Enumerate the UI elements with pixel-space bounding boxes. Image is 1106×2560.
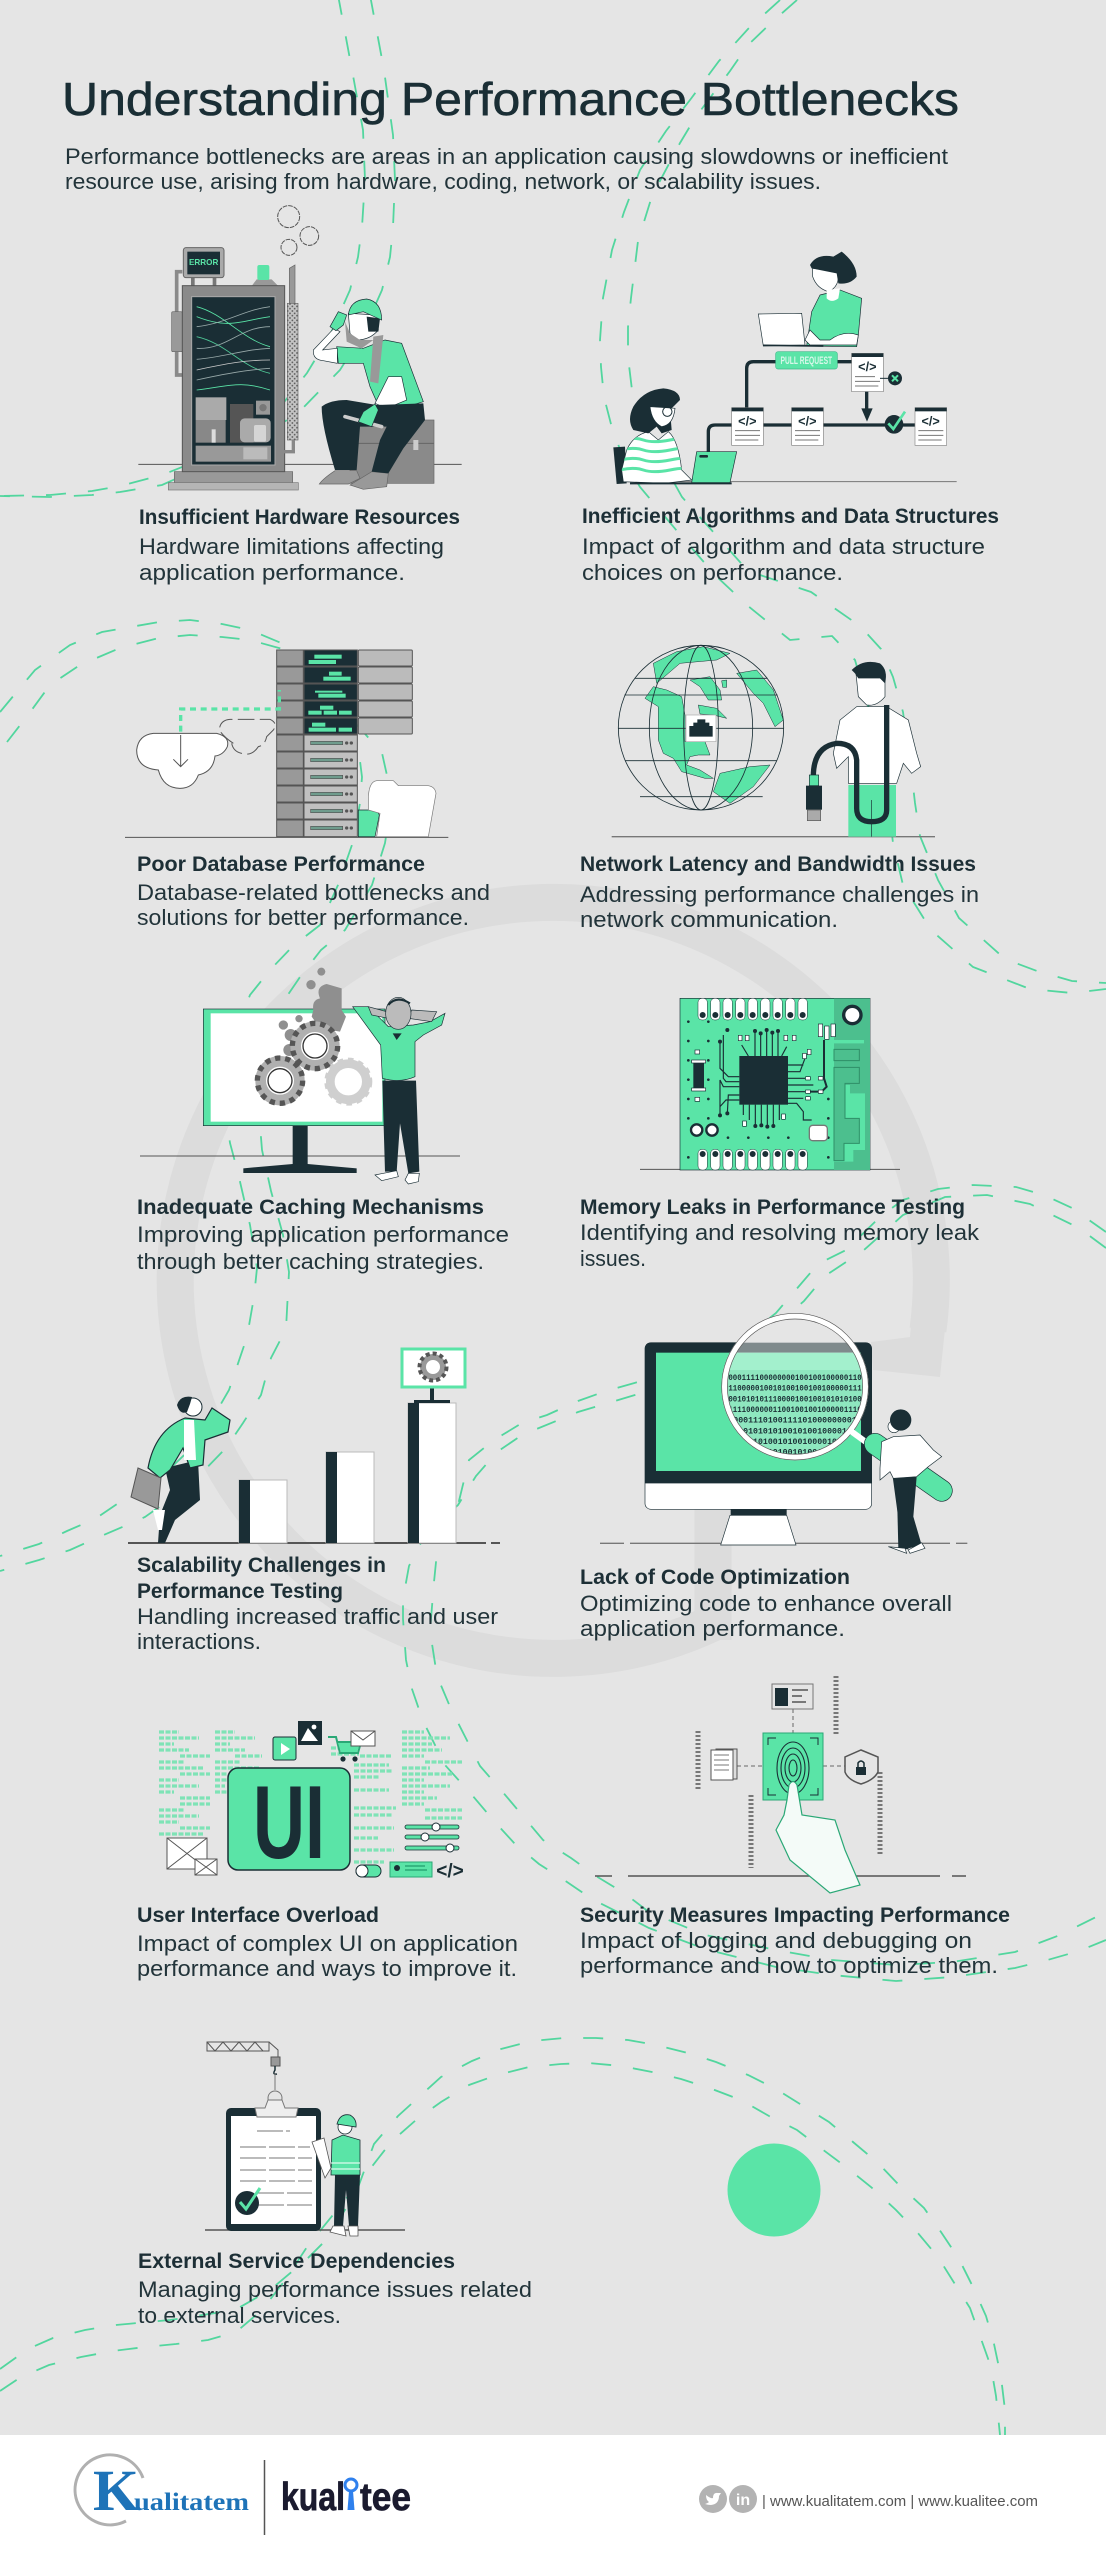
description: [137, 1931, 518, 1981]
heading: Performance Testing: [137, 1579, 343, 1603]
intro paragraph: [65, 144, 948, 194]
description: Impact of logging and debugging on: [580, 1928, 972, 1953]
description: [580, 1220, 980, 1271]
icon: developers and pull request flow: </>: [798, 414, 816, 428]
description: Identifying and resolving memory leak: [580, 1220, 980, 1245]
heading: User Interface Overload: [137, 1903, 379, 1927]
icon: monitor, magnifying glass with binary and man: 110101010010100100001000001: [728, 1437, 862, 1447]
logo: Kualitatem: ualitatem: [134, 2489, 249, 2516]
description: interactions.: [137, 1629, 261, 1654]
icon: UI card with interface elements: UI: [253, 1765, 325, 1881]
description: through better caching strategies.: [137, 1249, 484, 1274]
heading: Security Measures Impacting Performance: [580, 1903, 1010, 1927]
description: [137, 880, 490, 930]
description: [582, 534, 985, 585]
heading: [137, 1553, 386, 1603]
icon: monitor, magnifying glass with binary and man: [600, 1313, 967, 1553]
description: [137, 1222, 509, 1274]
icon: UI card with interface elements: </>: [436, 1861, 464, 1882]
logo: kualitee: tee: [360, 2476, 411, 2519]
intro paragraph: resource use, arising from hardware, coding, network, or scalability issues.: [65, 169, 821, 194]
heading: Network Latency and Bandwidth Issues: [580, 852, 976, 876]
icon: crane, clipboard and worker: [205, 2042, 405, 2236]
description: [138, 2277, 532, 2328]
logo: kualitee: [281, 2476, 411, 2519]
intro paragraph: Performance bottlenecks are areas in an application causing slowdowns or inefficient: [65, 144, 948, 169]
description: [580, 882, 979, 932]
description: [139, 534, 444, 585]
description: Database-related bottlenecks and: [137, 880, 490, 905]
heading: Scalability Challenges in: [137, 1553, 386, 1577]
panel: memory leaks in performance testing: [580, 998, 980, 1271]
heading: External Service Dependencies: [138, 2249, 455, 2273]
icon: monitor, magnifying glass with binary and man: 000011101001111010000000010: [728, 1416, 862, 1426]
social icons: [699, 2485, 757, 2513]
panel: external service dependencies: [138, 2042, 532, 2328]
panel: poor database performance: [125, 650, 490, 930]
icon: monitor, magnifying glass with binary and man: 001010101010010100100001111: [728, 1426, 862, 1436]
description: [137, 1604, 498, 1654]
logo: Kualitatem: [75, 2455, 249, 2525]
icon: circuit board: [640, 998, 900, 1170]
heading: Poor Database Performance: [137, 852, 425, 876]
description: Impact of algorithm and data structure: [582, 534, 985, 559]
heading: Memory Leaks in Performance Testing: [580, 1195, 965, 1219]
heading: Lack of Code Optimization: [580, 1565, 850, 1589]
description: application performance.: [580, 1616, 845, 1641]
description: Impact of complex UI on application: [137, 1931, 518, 1956]
description: network communication.: [580, 907, 838, 932]
decorative green circle: [728, 2144, 820, 2236]
description: Handling increased traffic and user: [137, 1604, 498, 1629]
icon: developers and pull request flow: </>: [738, 414, 756, 428]
icon: monitor, magnifying glass with binary and man: 001010101110000100100101010100: [728, 1394, 862, 1404]
description: to external services.: [138, 2303, 341, 2328]
panel: network latency and bandwidth issues: [580, 645, 979, 932]
social icons: in: [736, 2492, 750, 2509]
icon: overheated server and worker: [138, 206, 462, 490]
icon: server rack, clouds and folder: [125, 650, 448, 837]
icon: growing bars and woman with briefcase: [128, 1349, 500, 1543]
logo: Kualitatem: K: [93, 2458, 139, 2523]
panel: inefficient algorithms and data structures: [582, 252, 999, 585]
description: choices on performance.: [582, 560, 843, 585]
description: Hardware limitations affecting: [139, 534, 444, 559]
description: issues.: [580, 1246, 646, 1271]
description: [580, 1928, 998, 1978]
description: performance and ways to improve it.: [137, 1956, 517, 1981]
icon: UI card with interface elements: [159, 1721, 464, 1882]
icon: overheated server and worker: ERROR: [189, 257, 218, 267]
panel: user interface overload: [137, 1721, 518, 1981]
icon: monitor, magnifying glass with binary and man: 110000010010100100100100000111: [728, 1384, 862, 1394]
description: application performance.: [139, 560, 405, 585]
panel: security measures impacting performance: [580, 1676, 1010, 1978]
icon: monitor, magnifying glass with binary and man: 000111100000000100100100000110: [728, 1373, 862, 1383]
description: Improving application performance: [137, 1222, 509, 1247]
icon: fingerprint scanner and hand: [595, 1676, 966, 1893]
footer: [0, 2435, 1106, 2560]
description: performance and how to optimize them.: [580, 1953, 998, 1978]
panel: scalability challenges: [128, 1349, 500, 1654]
heading: Inadequate Caching Mechanisms: [137, 1195, 484, 1219]
icon: monitor with broken gears and stressed man: [140, 968, 460, 1184]
icon: developers and pull request flow: [613, 252, 957, 484]
title: Understanding Performance Bottlenecks: [62, 73, 959, 125]
icon: developers and pull request flow: </>: [858, 360, 876, 374]
description: Managing performance issues related: [138, 2277, 532, 2302]
icon: developers and pull request flow: </>: [922, 414, 940, 428]
description: [580, 1591, 952, 1641]
heading: Insufficient Hardware Resources: [139, 505, 460, 529]
heading: Inefficient Algorithms and Data Structures: [582, 504, 999, 528]
panel: inadequate caching mechanisms: [137, 968, 509, 1274]
icon: monitor, magnifying glass with binary and man: 010101001010010100100010100: [728, 1448, 862, 1458]
description: solutions for better performance.: [137, 905, 469, 930]
website links: | www.kualitatem.com | www.kualitee.com: [762, 2493, 1038, 2510]
panel: lack of code optimization: [580, 1313, 967, 1641]
description: Optimizing code to enhance overall: [580, 1591, 952, 1616]
logo: kualitee: kual: [281, 2476, 345, 2519]
description: Addressing performance challenges in: [580, 882, 979, 907]
icon: monitor, magnifying glass with binary and man: 111100000011001001001000001110: [728, 1405, 862, 1415]
watermark: ring logo: [175, 902, 948, 1658]
icon: developers and pull request flow: PULL REQUEST: [780, 355, 832, 367]
panel: insufficient hardware resources: [138, 206, 462, 585]
icon: globe, ethernet port and man with cable: [612, 645, 935, 837]
